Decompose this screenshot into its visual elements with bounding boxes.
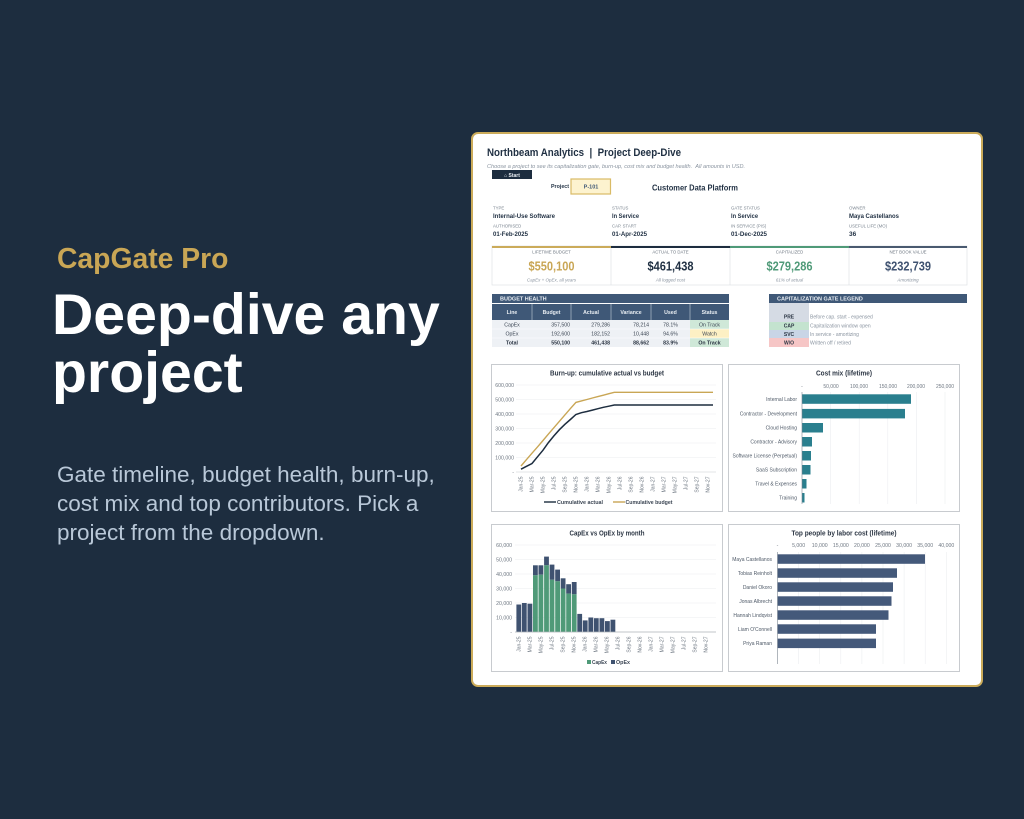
chart: top people: Hannah Lindqvist xyxy=(733,613,773,619)
chart: capex vs opex: May-26 xyxy=(605,636,611,653)
chart: burn-up: Nov-27 xyxy=(706,476,712,493)
KPI strip: $550,100 xyxy=(528,260,575,274)
budget health table: Budget xyxy=(543,310,561,316)
KPI strip: LIFETIME BUDGET xyxy=(532,250,571,254)
project metadata: TYPE xyxy=(493,206,504,210)
budget health table: Total xyxy=(506,340,519,346)
KPI strip: ACTUAL TO DATE xyxy=(652,250,689,254)
KPI strip: CapEx + OpEx, all years xyxy=(527,278,577,282)
capitalization gate legend: CAP xyxy=(784,324,795,330)
budget health table: BUDGET HEALTH xyxy=(500,296,547,302)
body copy: cost mix and top contributors. Pick a xyxy=(57,491,418,516)
chart: top people: 35,000 xyxy=(917,543,933,549)
KPI strip: Amortizing xyxy=(896,278,919,282)
project metadata: 01-Dec-2025 xyxy=(731,231,767,238)
chart: cost mix: Internal Labor xyxy=(766,397,797,403)
budget health table: 10,448 xyxy=(633,332,649,338)
budget health table: 357,500 xyxy=(551,322,570,328)
budget health table: Line xyxy=(507,310,517,316)
budget health table: 78.1% xyxy=(663,322,678,328)
chart: burn-up: 600,000 xyxy=(495,383,514,389)
chart: burn-up: 500,000 xyxy=(495,397,514,403)
chart: burn-up: Mar-25 xyxy=(530,476,536,492)
chart: burn-up: Sep-26 xyxy=(629,476,635,493)
budget health table: 182,152 xyxy=(591,332,610,338)
panel: dashboard card xyxy=(472,133,982,686)
chart: capex vs opex: 60,000 xyxy=(496,543,512,549)
capitalization gate legend: PRE xyxy=(784,314,795,320)
capitalization gate legend xyxy=(769,294,967,347)
chart: capex vs opex: Jul-26 xyxy=(616,636,622,650)
chart: cost mix: 250,000 xyxy=(936,384,954,390)
project selector: Project xyxy=(551,184,569,190)
chart: capex vs opex: Mar-26 xyxy=(594,636,600,652)
bars: opex xyxy=(516,557,615,632)
chart: burn-up: 200,000 xyxy=(495,441,514,447)
chart: burn-up: May-26 xyxy=(607,476,613,493)
chart: capex vs opex: Jan-26 xyxy=(583,636,589,652)
chart: capex vs opex: Sep-27 xyxy=(693,636,699,653)
capitalization gate legend: W/O xyxy=(784,340,794,346)
capitalization gate legend: Written off / retired xyxy=(810,340,851,346)
chart: top people: 10,000 xyxy=(812,543,828,549)
chart: burn-up: Sep-27 xyxy=(695,476,701,493)
chart: capex vs opex: Mar-25 xyxy=(528,636,534,652)
chart: cost mix: SaaS Subscription xyxy=(756,467,797,473)
chart: top people: Maya Castellanos xyxy=(732,557,772,563)
chart: burn-up xyxy=(492,364,722,512)
project metadata: In Service xyxy=(612,213,639,220)
KPI strip: 61% of actual xyxy=(776,278,804,282)
legend: burn-up xyxy=(544,500,673,506)
KPI strip: NET BOOK VALUE xyxy=(889,250,927,254)
chart: capex vs opex: - xyxy=(510,630,512,636)
body copy: Gate timeline, budget health, burn-up, xyxy=(57,462,435,487)
KPI strip xyxy=(492,246,967,285)
chart: cost mix: 50,000 xyxy=(823,384,839,390)
chart: top people: 20,000 xyxy=(854,543,870,549)
budget health table: 550,100 xyxy=(551,340,570,346)
chart: cost mix xyxy=(728,364,960,512)
KPI strip: $279,286 xyxy=(766,260,813,274)
chart: top people: 5,000 xyxy=(792,543,805,549)
chart: burn-up: Jul-27 xyxy=(684,476,690,490)
chart: capex vs opex: Sep-25 xyxy=(561,636,567,653)
chart: capex vs opex: Sep-26 xyxy=(627,636,633,653)
project name: Customer Data Platform xyxy=(652,182,738,192)
line: cumulative actual xyxy=(521,405,713,469)
chart: cost mix: 200,000 xyxy=(907,384,925,390)
chart: capex vs opex: Nov-25 xyxy=(572,636,578,653)
chart: burn-up: May-25 xyxy=(541,476,547,493)
chart: top people: - xyxy=(777,543,779,549)
chart: cost mix: 150,000 xyxy=(879,384,897,390)
chart: capex vs opex xyxy=(492,524,722,672)
chart: capex vs opex: May-27 xyxy=(671,636,677,653)
chart: capex vs opex: Jan-25 xyxy=(517,636,523,652)
chart: top people: 25,000 xyxy=(875,543,891,549)
budget health table: Status xyxy=(702,310,718,316)
chart: cost mix: 100,000 xyxy=(850,384,868,390)
capitalization gate legend: SVC xyxy=(784,332,795,338)
budget health table: Used xyxy=(664,310,677,316)
chart: burn-up: Sep-25 xyxy=(563,476,569,493)
legend: capex vs opex xyxy=(587,660,630,666)
project selector xyxy=(551,179,610,194)
budget health table: 192,600 xyxy=(551,332,570,338)
chart: burn-up: 100,000 xyxy=(495,455,514,461)
capitalization gate legend: Capitalization window open xyxy=(810,324,871,330)
chart: capex vs opex: 30,000 xyxy=(496,586,512,592)
project metadata: CAP. START xyxy=(612,224,637,228)
chart title: burn-up: Burn-up: cumulative actual vs budget xyxy=(550,370,665,378)
KPI strip: All logged cost xyxy=(655,278,686,282)
capitalization gate legend: In service - amortizing xyxy=(810,332,859,338)
budget health table: On Track xyxy=(698,340,721,346)
chart: cost mix: Contractor - Development xyxy=(740,411,798,417)
chart: top people: 40,000 xyxy=(938,543,954,549)
capitalization gate legend: CAPITALIZATION GATE LEGEND xyxy=(777,296,863,302)
chart title: cost mix: Cost mix (lifetime) xyxy=(816,370,872,378)
line: cumulative budget xyxy=(521,392,713,466)
legend: capex vs opex: CapEx xyxy=(592,660,607,666)
budget health table: 94.6% xyxy=(663,332,678,338)
chart: capex vs opex: Nov-26 xyxy=(638,636,644,653)
project metadata: GATE STATUS xyxy=(731,206,760,210)
chart: cost mix: Contractor - Advisory xyxy=(750,439,797,445)
chart: top people xyxy=(728,524,960,672)
budget health table xyxy=(492,294,729,347)
chart: cost mix: Travel & Expenses xyxy=(755,481,797,487)
budget health table: On Track xyxy=(699,322,720,328)
chart: burn-up: 400,000 xyxy=(495,412,514,418)
budget health table: Variance xyxy=(620,310,642,316)
chart: top people: Daniel Okoro xyxy=(743,585,772,591)
chart: capex vs opex: Jul-27 xyxy=(682,636,688,650)
chart: top people: Priya Raman xyxy=(743,641,772,647)
body copy: project from the dropdown. xyxy=(57,520,325,545)
project selector: P-101 xyxy=(584,184,598,190)
budget health table: OpEx xyxy=(506,332,519,338)
chart title: top people: Top people by labor cost (lifetime) xyxy=(792,530,896,538)
chart: top people: 15,000 xyxy=(833,543,849,549)
KPI strip: $461,438 xyxy=(648,260,694,274)
chart: capex vs opex: 40,000 xyxy=(496,572,512,578)
chart: cost mix: Software License (Perpetual) xyxy=(733,453,797,459)
bars: capex xyxy=(533,565,577,632)
budget health table: 78,214 xyxy=(633,322,649,328)
budget health table: CapEx xyxy=(504,322,520,328)
project metadata: 01-Feb-2025 xyxy=(493,231,528,238)
chart: burn-up: Jul-26 xyxy=(618,476,624,490)
project metadata: IN SERVICE (PIS) xyxy=(731,224,767,228)
headline: Deep-dive any xyxy=(52,283,440,347)
chart: capex vs opex: Mar-27 xyxy=(660,636,666,652)
project metadata: Internal-Use Software xyxy=(493,213,555,220)
budget health table: Actual xyxy=(583,310,599,316)
chart title: capex vs opex: CapEx vs OpEx by month xyxy=(570,530,644,538)
start button: ⌂ Start xyxy=(504,173,520,179)
project metadata: 36 xyxy=(849,231,857,238)
chart: burn-up: Jul-25 xyxy=(552,476,558,490)
dashboard title: Northbeam Analytics | Project Deep-Dive xyxy=(487,147,681,159)
chart: capex vs opex: 50,000 xyxy=(496,557,512,563)
project metadata: USEFUL LIFE (MO) xyxy=(849,224,888,228)
chart: burn-up: May-27 xyxy=(673,476,679,493)
legend: burn-up: Cumulative budget xyxy=(626,500,673,506)
chart: burn-up: - xyxy=(512,470,514,476)
chart: cost mix: Training xyxy=(779,495,797,501)
bars: labor cost xyxy=(778,554,925,648)
chart: top people: Liam O'Connell xyxy=(738,627,772,633)
project metadata: Maya Castellanos xyxy=(849,213,899,220)
dashboard subtitle: Choose a project to see its capitalization gate, burn-up, cost mix and budget health. All amounts in USD. xyxy=(487,164,745,170)
chart: burn-up: Nov-26 xyxy=(640,476,646,493)
budget health table: 88,662 xyxy=(633,340,649,346)
headline: project xyxy=(52,341,243,405)
chart: cost mix: Cloud Hosting xyxy=(766,425,797,431)
legend: capex vs opex: OpEx xyxy=(616,660,630,666)
chart: burn-up: Jan-26 xyxy=(585,476,591,492)
chart: burn-up: Jan-25 xyxy=(519,476,525,492)
eyebrow: product name: CapGate Pro xyxy=(57,242,228,274)
project metadata: AUTHORISED xyxy=(493,224,521,228)
chart: burn-up: Jan-27 xyxy=(651,476,657,492)
chart: capex vs opex: May-25 xyxy=(539,636,545,653)
chart: cost mix: - xyxy=(801,384,803,390)
chart: capex vs opex: 10,000 xyxy=(496,615,512,621)
project metadata xyxy=(493,206,899,238)
budget health table: Watch xyxy=(702,332,717,338)
start button xyxy=(492,170,532,179)
bars: cost categories xyxy=(802,394,911,502)
legend: burn-up: Cumulative actual xyxy=(557,500,604,506)
chart: burn-up: Nov-25 xyxy=(574,476,580,493)
KPI strip: CAPITALIZED xyxy=(776,250,803,254)
headline xyxy=(52,283,440,405)
capitalization gate legend: Before cap. start - expensed xyxy=(810,314,873,320)
budget health table: 83.9% xyxy=(663,340,678,346)
chart: top people: 30,000 xyxy=(896,543,912,549)
chart: capex vs opex: Nov-27 xyxy=(704,636,710,653)
budget health table: 461,438 xyxy=(591,340,610,346)
project metadata: 01-Apr-2025 xyxy=(612,231,647,238)
chart: top people: Tobias Reinholt xyxy=(738,571,773,577)
chart: capex vs opex: Jul-25 xyxy=(550,636,556,650)
chart: burn-up: 300,000 xyxy=(495,426,514,432)
chart: top people: Jonas Albrecht xyxy=(739,599,773,605)
project metadata: In Service xyxy=(731,213,758,220)
budget health table: 279,286 xyxy=(591,322,610,328)
project metadata: STATUS xyxy=(612,206,628,210)
KPI strip: $232,739 xyxy=(885,260,931,274)
chart: burn-up: Mar-27 xyxy=(662,476,668,492)
project metadata: OWNER xyxy=(849,206,865,210)
chart: burn-up: Mar-26 xyxy=(596,476,602,492)
chart: capex vs opex: 20,000 xyxy=(496,601,512,607)
body copy xyxy=(57,462,435,545)
chart: capex vs opex: Jan-27 xyxy=(649,636,655,652)
